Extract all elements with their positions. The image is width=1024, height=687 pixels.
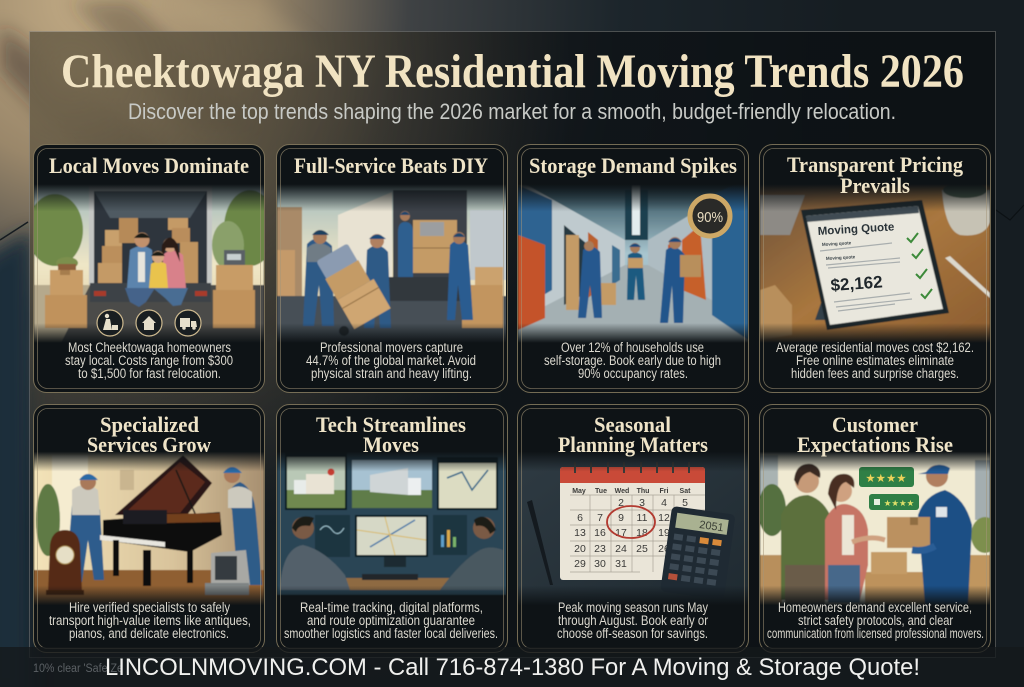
panel: Storage Demand Spikes — [518, 144, 748, 392]
body text — [557, 600, 708, 641]
calendar: Thu — [637, 488, 649, 495]
calendar: 9 — [618, 512, 624, 524]
body text: 90% occupancy rates. — [578, 366, 688, 381]
calendar: 24 — [615, 543, 627, 555]
calendar: 19 — [658, 527, 670, 539]
body text: Homeowners demand excellent service, — [778, 600, 972, 615]
panel: Transparent Pricing Prevails — [760, 144, 990, 392]
illustration: tablet with moving quote — [760, 180, 990, 345]
body text: Professional movers capture — [320, 340, 463, 355]
calendar — [560, 462, 705, 580]
illustration: customers with mover — [758, 450, 999, 607]
calculator: 2051 — [698, 519, 724, 534]
body text: and route optimization guarantee — [307, 613, 475, 628]
body text: strict safety protocols, and clear — [798, 613, 953, 628]
footer bar: LINCOLNMOVING.COM - Call 716-874-1380 For A Moving & Storage Quote! — [105, 654, 920, 681]
body text: Hire verified specialists to safely — [69, 600, 230, 615]
calendar: 25 — [636, 543, 648, 555]
body text: Over 12% of households use — [561, 340, 704, 355]
illustration: calendar, pen and calculator — [518, 445, 748, 605]
subtitle: Discover the top trends shaping the 2026 market for a smooth, budget-friendly relocation. — [128, 99, 896, 124]
heading: Services Grow — [87, 432, 211, 457]
body text: choose off-season for savings. — [557, 626, 708, 641]
tablet screen content: Moving quote — [822, 240, 852, 247]
body text — [544, 340, 721, 381]
panel: Specialized Services Grow — [34, 404, 264, 652]
icons: mover, house, truck — [97, 310, 201, 336]
calendar: Tue — [595, 488, 607, 495]
body text: self-storage. Book early due to high — [544, 353, 721, 368]
heading — [316, 412, 466, 457]
calendar: 12 — [658, 512, 670, 524]
calendar: Wed — [615, 488, 629, 495]
review bubbles with stars: ★★★★ — [865, 471, 907, 485]
calendar: 18 — [636, 527, 648, 539]
calendar: 5 — [682, 497, 688, 509]
calendar: 17 — [615, 527, 627, 539]
body text: smoother logistics and faster local deliveries. — [284, 626, 498, 641]
review bubbles with stars: ★★★★ — [884, 499, 915, 509]
tablet screen content — [817, 221, 932, 311]
heading — [558, 412, 708, 457]
illustration: storage corridor — [518, 178, 748, 345]
calendar: 20 — [574, 543, 586, 555]
calculator — [662, 506, 729, 586]
calendar: Fri — [660, 488, 669, 495]
calendar: 13 — [574, 527, 586, 539]
badge: 90% occupancy: 90% — [697, 209, 723, 226]
badge: 90% occupancy — [690, 196, 730, 236]
calendar: 30 — [594, 558, 606, 570]
heading: Customer — [832, 412, 918, 437]
panel: Full-Service Beats DIY — [276, 144, 508, 392]
calendar: 6 — [577, 512, 583, 524]
illustration: movers with dolly and truck — [277, 180, 507, 350]
review bubbles with stars — [859, 467, 919, 510]
footer bar: 10% clear 'Safe Ze — [33, 663, 123, 675]
heading: Transparent Pricing — [787, 152, 963, 177]
body text: through August. Book early or — [558, 613, 708, 628]
heading: Expectations Rise — [797, 432, 953, 457]
heading: Storage Demand Spikes — [529, 153, 737, 178]
calendar: 16 — [594, 527, 606, 539]
body text: Peak moving season runs May — [558, 600, 708, 615]
body text: Free online estimates eliminate — [796, 353, 954, 368]
calendar: May — [572, 488, 586, 495]
heading — [787, 152, 963, 198]
footer bar — [0, 647, 1024, 687]
illustration: family on moving truck — [34, 186, 264, 342]
calendar: 26 — [658, 543, 670, 555]
calendar: Sat — [680, 488, 691, 495]
body text: stay local. Costs range from $300 — [65, 353, 233, 368]
body text: to $1,500 for fast relocation. — [78, 366, 221, 381]
heading: Full-Service Beats DIY — [294, 153, 488, 178]
heading: Seasonal — [594, 412, 671, 437]
calendar: 2 — [618, 497, 624, 509]
panel: Seasonal Planning Matters — [518, 404, 748, 652]
heading: Tech Streamlines — [316, 412, 466, 437]
body text: hidden fees and surprise charges. — [791, 366, 959, 381]
calendar: 31 — [615, 558, 627, 570]
calendar: 11 — [637, 512, 648, 524]
panel: Local Moves Dominate — [27, 144, 276, 392]
body text — [776, 340, 974, 381]
heading: Local Moves Dominate — [49, 153, 249, 178]
body text: transport high-value items like antiques, — [49, 613, 251, 628]
body text: physical strain and heavy lifting. — [311, 366, 472, 381]
tablet screen content: Moving Quote — [817, 221, 895, 238]
body text — [306, 340, 476, 381]
illustration: movers with grand piano — [34, 445, 264, 610]
body text: pianos, and delicate electronics. — [69, 626, 229, 641]
calendar: 7 — [597, 512, 603, 524]
heading: Prevails — [840, 173, 910, 198]
body text: 44.7% of the global market. Avoid — [306, 353, 476, 368]
calendar: 23 — [594, 543, 606, 555]
tablet screen content: $2,162 — [830, 272, 883, 295]
calendar: 29 — [574, 558, 586, 570]
calendar: 3 — [639, 497, 645, 509]
heading: Planning Matters — [558, 432, 708, 457]
illustration: dispatch monitors — [277, 445, 507, 595]
heading: Specialized — [100, 412, 199, 437]
body text — [284, 600, 498, 641]
heading — [797, 412, 953, 457]
calendar: 4 — [661, 497, 667, 509]
body text — [65, 340, 233, 381]
body text: Most Cheektowaga homeowners — [68, 340, 231, 355]
body text: Real-time tracking, digital platforms, — [300, 600, 483, 615]
heading — [87, 412, 211, 457]
panel: Tech Streamlines Moves — [276, 404, 508, 652]
heading: Moves — [363, 432, 419, 457]
tablet screen content: Moving quote — [826, 254, 856, 261]
body text — [767, 600, 984, 641]
body text: Average residential moves cost $2,162. — [776, 340, 974, 355]
body text — [49, 600, 251, 641]
panel: Customer Expectations Rise — [758, 404, 999, 652]
